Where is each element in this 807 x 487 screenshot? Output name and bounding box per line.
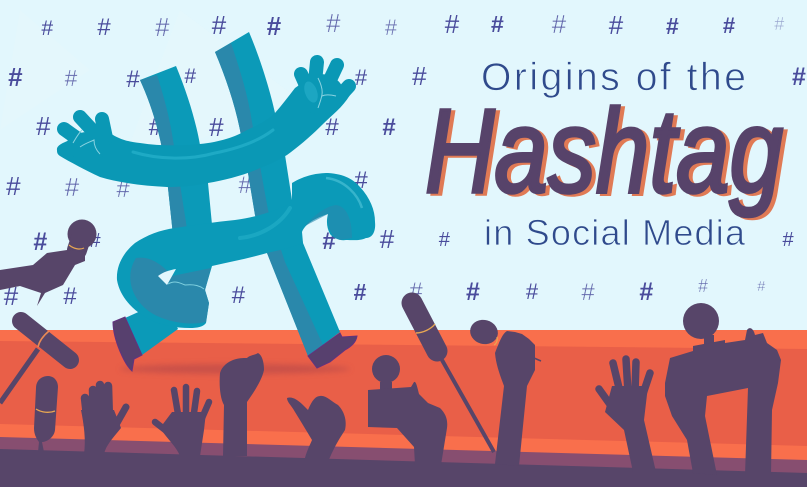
hashtag symbol pattern: # <box>209 112 224 142</box>
raised open hand 2 <box>155 387 209 456</box>
hashtag symbol pattern: # <box>385 15 398 40</box>
hashtag symbol pattern: # <box>698 276 708 296</box>
hashtag symbol pattern: # <box>757 278 766 295</box>
title <box>425 56 787 253</box>
hashtag symbol pattern: # <box>65 65 78 91</box>
boom microphone, left <box>0 321 70 403</box>
left vertical bar <box>140 66 213 235</box>
hashtag symbol pattern: # <box>116 176 130 203</box>
hashtag symbol pattern: # <box>97 14 111 41</box>
raised fist <box>220 353 264 456</box>
thumbs up hand <box>287 396 346 462</box>
standing microphone <box>34 376 58 452</box>
raised open hand 3 <box>599 359 656 472</box>
hashtag symbol pattern: # <box>89 230 101 252</box>
hashtag symbol pattern: # <box>581 279 595 306</box>
hashtag symbol pattern: # <box>438 229 450 251</box>
hashtag symbol pattern: # <box>65 172 80 202</box>
hashtag symbol pattern: # <box>609 10 624 40</box>
hashtag mascot <box>57 32 375 371</box>
hashtag symbol pattern: # <box>238 172 252 199</box>
hashtag symbol pattern: # <box>8 62 23 92</box>
hashtag symbol pattern: # <box>267 11 282 41</box>
title line: in Social Media: in Social Media <box>484 212 746 253</box>
hashtag symbol pattern: # <box>326 8 341 38</box>
lower arm <box>117 173 375 328</box>
hashtag symbol pattern: # <box>231 282 245 309</box>
hashtag symbol pattern: # <box>774 14 785 34</box>
hashtag symbol pattern: # <box>409 278 423 305</box>
hashtag symbol pattern: # <box>41 17 53 40</box>
boom microphone, centre <box>412 303 494 452</box>
hand holding microphone, left <box>0 220 96 306</box>
right vertical bar <box>215 32 340 356</box>
hashtag symbol pattern: # <box>155 12 170 42</box>
hashtag symbol pattern: # <box>552 9 567 39</box>
left leg <box>125 300 178 355</box>
crowd silhouettes <box>0 220 781 475</box>
big camera with hands <box>665 303 781 475</box>
hashtag symbol pattern: # <box>4 281 19 311</box>
hashtag symbol pattern: # <box>325 114 339 141</box>
hashtag symbol pattern: # <box>723 13 735 38</box>
stage band <box>0 330 807 487</box>
raised open hand 1 <box>81 385 126 454</box>
left shoe <box>113 317 142 371</box>
hashtag symbol pattern: # <box>666 13 679 39</box>
hashtag symbol pattern: # <box>380 224 395 254</box>
hashtag symbol pattern <box>4 8 806 311</box>
hashtag symbol pattern: # <box>355 65 368 90</box>
hashtag symbol pattern: # <box>792 63 806 91</box>
hashtag symbol pattern: # <box>412 61 427 91</box>
hashtag symbol pattern: # <box>445 9 460 39</box>
hashtag symbol pattern: # <box>36 111 51 141</box>
hashtag symbol pattern: # <box>382 114 396 141</box>
hashtag symbol pattern: # <box>184 65 196 88</box>
upper arm with hands <box>57 62 350 187</box>
hashtag symbol pattern: # <box>526 279 539 304</box>
hashtag symbol pattern: # <box>322 228 336 255</box>
hashtag symbol pattern: # <box>491 11 504 37</box>
right shoe <box>308 333 357 368</box>
hashtag symbol pattern: # <box>639 278 653 306</box>
hashtag symbol pattern: # <box>212 10 227 40</box>
title line: Origins of the: Origins of the <box>481 56 746 99</box>
hashtag symbol pattern: # <box>782 229 794 251</box>
handheld camera, centre <box>368 355 447 465</box>
hashtag symbol pattern: # <box>354 279 367 305</box>
hashtag symbol pattern: # <box>63 283 77 310</box>
hashtag symbol pattern: # <box>6 171 21 201</box>
hashtag symbol pattern: # <box>354 167 368 194</box>
hashtag symbol pattern: # <box>33 228 47 256</box>
hashtag symbol pattern: # <box>148 114 162 141</box>
hand holding microphone, centre <box>467 317 541 466</box>
hashtag symbol pattern: # <box>126 66 140 93</box>
hashtag symbol pattern: # <box>466 278 480 306</box>
